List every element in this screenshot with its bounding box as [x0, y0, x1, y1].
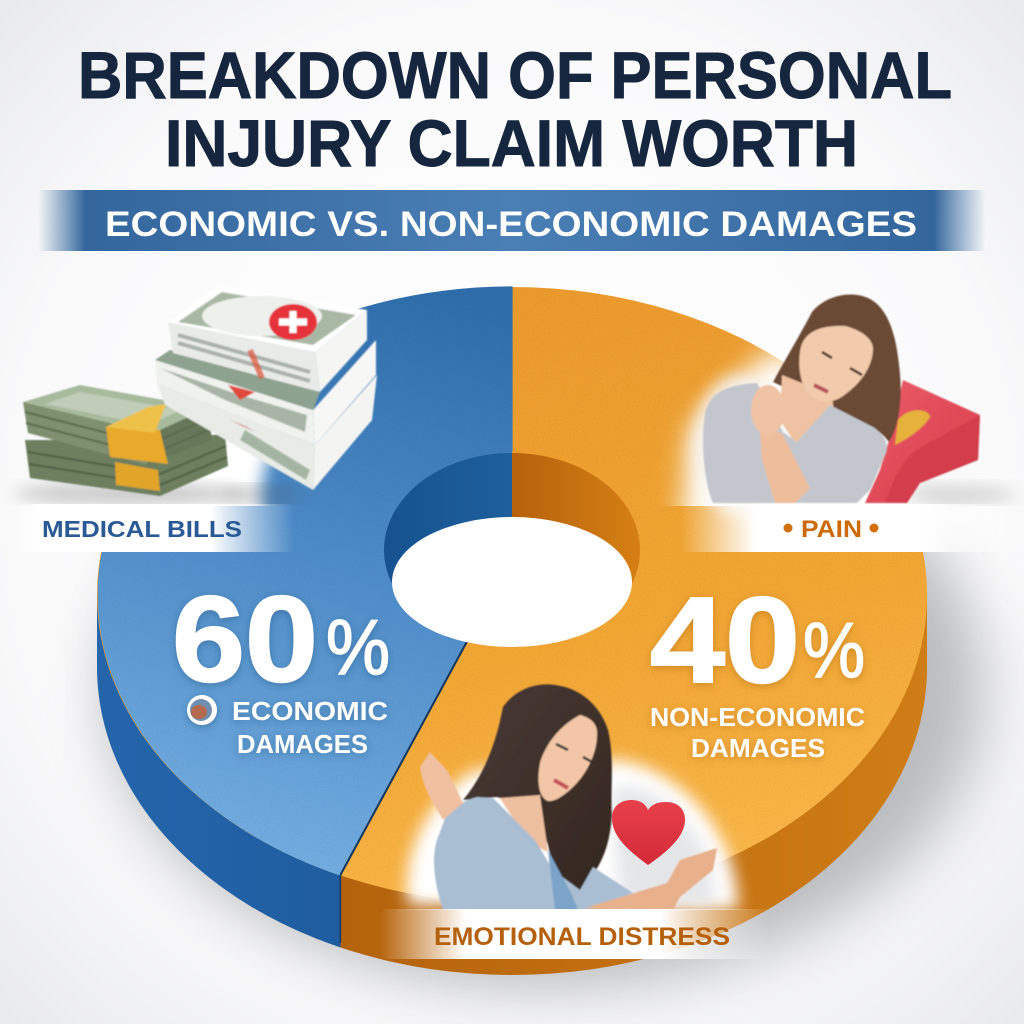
- outstretched arm: [585, 848, 717, 910]
- icon: economic damages badge: [187, 695, 217, 725]
- label: pain: PAIN: [801, 516, 862, 543]
- title: INJURY CLAIM WORTH: [165, 106, 858, 180]
- stat: 60% economic damages: 60: [172, 571, 318, 707]
- stat: 60% economic damages: [172, 571, 390, 759]
- slice: 40% non-economic: [97, 287, 927, 903]
- stat: 40% non-economic damages: [650, 572, 865, 763]
- label: medical bills: MEDICAL BILLS: [42, 516, 242, 542]
- raised hand: [420, 752, 463, 820]
- stat: 60% economic damages: DAMAGES: [237, 729, 368, 759]
- ring side: economic: [97, 596, 340, 948]
- label: emotional distress: EMOTIONAL DISTRESS: [434, 923, 730, 951]
- subtitle banner: ECONOMIC VS. NON-ECONOMIC DAMAGES: [105, 205, 917, 244]
- icon: bottom bill stack: [157, 375, 377, 490]
- stat: 60% economic damages: %: [326, 603, 390, 691]
- icon: upper cash bundle: [23, 385, 212, 465]
- 3D ring chart: [97, 287, 927, 975]
- icon: red medical cross: [269, 304, 317, 340]
- face: [799, 326, 873, 402]
- icon: lower cash bundle: [25, 434, 228, 496]
- stat: 60% economic damages: ECONOMIC: [232, 696, 388, 726]
- label: emotional distress: [380, 909, 770, 959]
- shirt: [703, 383, 887, 503]
- illustration: woman with emotional distress: [407, 684, 738, 910]
- hand: [751, 385, 785, 435]
- label: medical bills: [16, 504, 294, 552]
- icon: heart: [612, 800, 685, 865]
- icon: red pillow: [865, 380, 980, 503]
- stat: 40% non-economic damages: 40: [650, 572, 800, 708]
- title: [78, 38, 952, 180]
- hair: [463, 684, 612, 890]
- label: pain: [680, 504, 1020, 552]
- stat: 40% non-economic damages: DAMAGES: [691, 733, 825, 763]
- icon: middle bill stack: [155, 340, 376, 445]
- illustration: cash and medical bill stacks: [23, 285, 377, 496]
- slice: 60% economic: [98, 287, 512, 875]
- stat: 40% non-economic damages: NON-ECONOMIC: [650, 702, 865, 732]
- neck: [780, 375, 835, 446]
- centre hole: [384, 453, 640, 647]
- title: BREAKDOWN OF PERSONAL: [78, 38, 952, 112]
- stat: 40% non-economic damages: %: [803, 606, 865, 694]
- arm: [760, 430, 810, 503]
- hair: [773, 294, 901, 442]
- ring side: non-economic: [340, 596, 927, 975]
- face: [538, 715, 597, 801]
- icon: top bill stack: [168, 285, 367, 392]
- neck: [500, 795, 548, 852]
- shirt: [434, 797, 633, 910]
- illustration: woman with neck pain: [694, 294, 980, 515]
- subtitle banner: [38, 190, 986, 251]
